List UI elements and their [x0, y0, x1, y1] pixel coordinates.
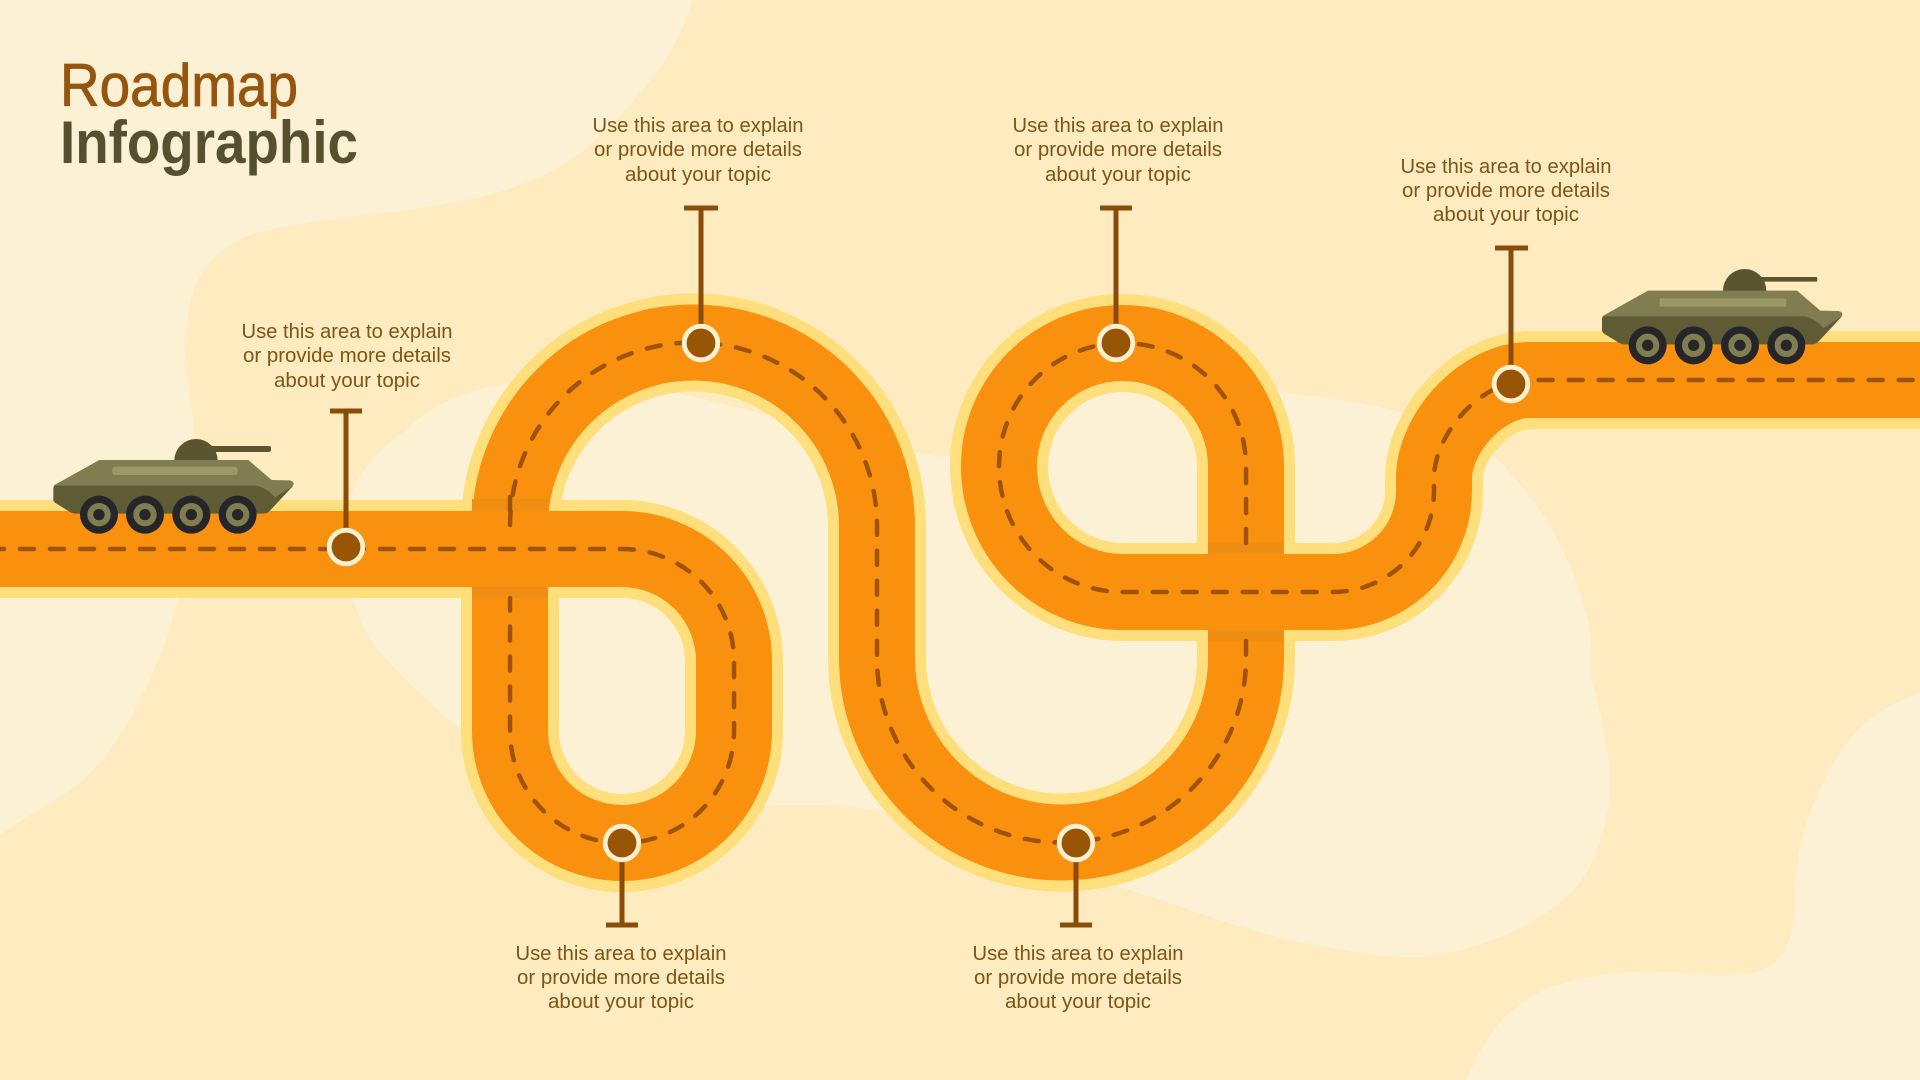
road centre dashes [0, 342, 1920, 843]
milestone 6: or provide more details [974, 967, 1182, 989]
title [60, 52, 358, 176]
milestone 2: about your topic [625, 164, 771, 186]
milestone 1: or provide more details [243, 345, 451, 367]
milestone 4: Use this area to explain [1400, 156, 1612, 178]
tank: start of road [53, 439, 294, 534]
milestone 1: about your topic [274, 370, 420, 392]
milestone 4: about your topic [1433, 204, 1579, 226]
title: Infographic [60, 109, 358, 176]
milestone 1 [242, 321, 452, 564]
milestone 2 [592, 115, 804, 360]
milestone 3: or provide more details [1014, 139, 1222, 161]
milestone 5 [516, 826, 726, 1013]
milestone 6 [972, 826, 1184, 1013]
milestone 5: or provide more details [517, 967, 725, 989]
milestone 5: Use this area to explain [516, 943, 726, 965]
milestone 2: or provide more details [594, 139, 802, 161]
crossing shadow bands [472, 499, 1284, 641]
road [0, 342, 1920, 843]
background blob: central light shape [345, 374, 1610, 957]
milestone 2: Use this area to explain [592, 115, 804, 137]
background blob: bottom-right corner [1466, 693, 1920, 1080]
milestone 5: about your topic [548, 991, 694, 1013]
milestone 6: about your topic [1005, 991, 1151, 1013]
milestone 1: Use this area to explain [242, 321, 452, 343]
milestone 3: Use this area to explain [1012, 115, 1224, 137]
milestone 3 [1012, 115, 1224, 360]
milestone 4 [1400, 156, 1612, 401]
milestone 6: Use this area to explain [972, 943, 1184, 965]
milestone 3: about your topic [1045, 164, 1191, 186]
milestone 4: or provide more details [1402, 180, 1610, 202]
tank: end of road [1602, 269, 1842, 364]
title: Roadmap [60, 52, 298, 119]
background blob: top-left and left band [0, 0, 692, 835]
